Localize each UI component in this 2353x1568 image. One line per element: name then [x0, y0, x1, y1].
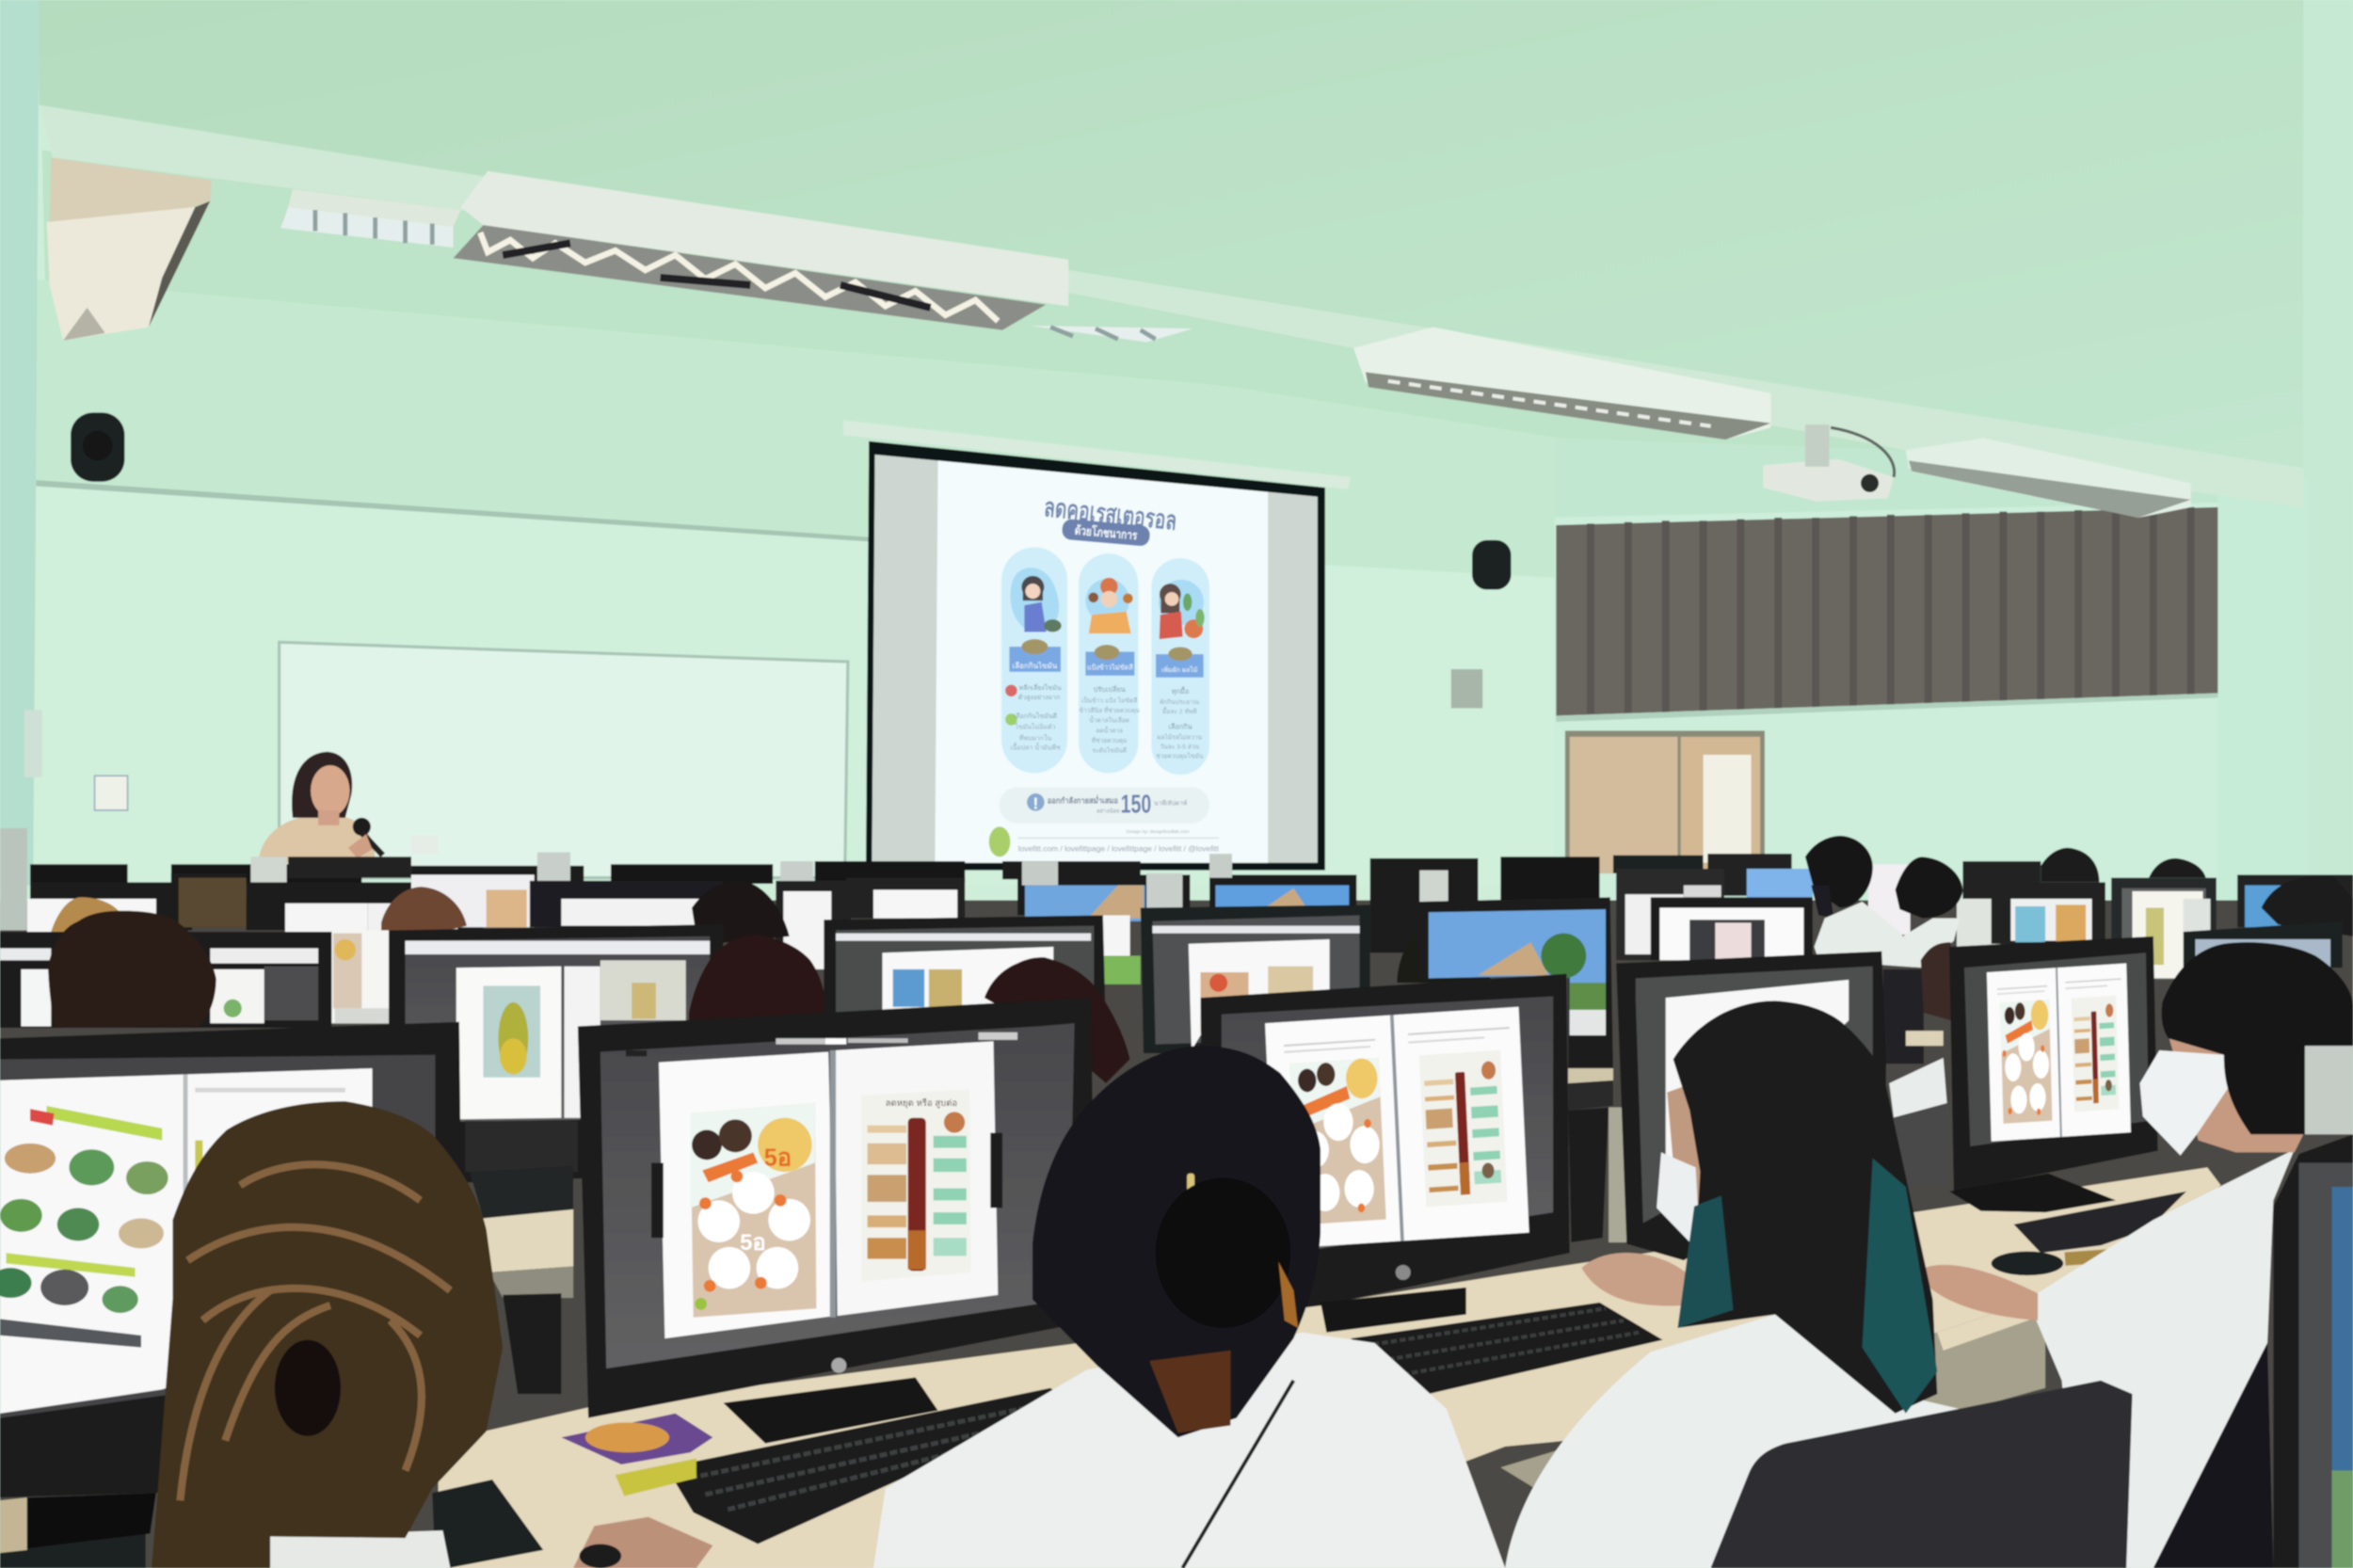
snack bag [561, 1414, 712, 1496]
back row students [51, 836, 2206, 968]
book infographic left: 5อ [740, 1230, 766, 1256]
exercise callout: ! [1032, 794, 1038, 813]
exercise callout: อย่างน้อย [1096, 808, 1120, 815]
column one: ตัวสูงอย่างมาก [1018, 694, 1060, 701]
toolbar [626, 1032, 1017, 1238]
keyboard and desk behind left [470, 1166, 573, 1394]
student head middle [689, 935, 827, 1032]
air conditioner [47, 157, 212, 341]
monitor with banana book [389, 924, 724, 1185]
monitor row three left [0, 932, 331, 1028]
monitor row three centre right [1141, 904, 1370, 1053]
column three [1151, 558, 1209, 775]
student with green hair [1505, 1000, 1960, 1568]
student front left [152, 1101, 712, 1568]
exercise callout [1000, 787, 1209, 824]
column three: เลือกกิน [1168, 723, 1193, 731]
column three: ช่วยควบคุมไขมัน [1156, 753, 1204, 760]
exercise callout: นาที/สัปดาห์ [1154, 800, 1187, 808]
speaker left [71, 412, 124, 482]
monitor behind green haired student [1616, 952, 1886, 1260]
wall items: thermostat and switch box [0, 669, 1482, 930]
ceiling light two [1353, 328, 1770, 440]
column three: ผลไม้รสไม่หวาน [1158, 734, 1203, 742]
column three: มื้อละ 2 ทัพพี [1162, 707, 1197, 715]
column two: เป็นข้าว แป้ง ไม่ขัดสี [1081, 696, 1137, 704]
slide footer [989, 826, 1220, 856]
speaker right [1472, 540, 1512, 590]
monitor row three centre [824, 915, 1106, 1035]
hp logo [831, 1358, 846, 1373]
right side back monitors [1651, 874, 2353, 980]
student head right middle [1397, 922, 1490, 983]
projected infographic [989, 492, 1220, 856]
projection screen [843, 420, 1351, 871]
slide subtitle pill [1062, 519, 1151, 547]
book infographic left [690, 1103, 816, 1318]
left front monitor [0, 1022, 464, 1497]
column two: น้ำตาลในเลือด [1089, 716, 1129, 725]
bottom left keyboard [0, 1480, 543, 1568]
keyboard centre right [1351, 1303, 1663, 1394]
column one: เนื้อปลา น้ำมันพืช [1010, 741, 1061, 751]
book chart contents [0, 1088, 345, 1348]
paper name cards [250, 836, 2000, 947]
book infographic right [861, 1089, 971, 1281]
column two [1079, 553, 1140, 773]
window curtain [1556, 507, 2217, 722]
desk [439, 1167, 2221, 1568]
column one: หลีกเลี่ยงไขมัน [1019, 683, 1062, 692]
book infographic strip between monitors [331, 930, 389, 1023]
main monitor [578, 998, 1096, 1418]
keyboard centre [666, 1388, 1068, 1544]
far right monitor [2273, 1134, 2353, 1568]
column two: ระดับไขมันดี [1092, 747, 1127, 755]
door [1565, 730, 1765, 873]
book infographic left: 5อ [764, 1145, 792, 1172]
column three: วันละ 3-5 ส่วน [1160, 744, 1200, 751]
slide footer: Design by: designfoodlab.com [1127, 829, 1189, 835]
monitor with building photo [1417, 897, 1613, 1068]
ceiling light one [280, 171, 1193, 342]
student head row three left [48, 911, 216, 1028]
base behind desks [0, 901, 2353, 1568]
column two: ปรับเปลี่ยน [1094, 684, 1126, 694]
monitor right front [1949, 936, 2158, 1212]
far monitor row [30, 854, 2041, 952]
column three: เพิ่มผัก ผลไม้ [1161, 665, 1197, 674]
student head centre back [984, 957, 1130, 1083]
keyboard right [1992, 1192, 2186, 1275]
student front right [1916, 942, 2353, 1568]
slide subtitle pill: ด้วยโภชนาการ [1074, 522, 1138, 542]
slide footer: lovefitt.com / lovefittpage / lovefittpage / lovefitt / @lovefitt [1018, 844, 1220, 853]
main monitor stand [724, 1378, 938, 1444]
column three: ทุกมื้อ [1172, 686, 1189, 696]
column one: เลือกกินไขมันดี [1014, 712, 1057, 720]
second monitor row [27, 864, 1911, 984]
column two: ข้าวสีนิล ที่ช่วยควบคุม [1079, 706, 1140, 714]
student front centre [873, 1046, 1505, 1568]
column one: ไขมันไม่อิ่มตัว [1015, 723, 1056, 731]
column two: ที่ช่วยควบคุม [1092, 736, 1128, 744]
desks and chairs right of middle [1568, 942, 1951, 1242]
ceiling light three [1906, 439, 2191, 518]
monitor centre right front [1201, 974, 1570, 1333]
projector [1763, 424, 1895, 501]
column two: แป้งข้าวไม่ขัดสี [1087, 663, 1133, 671]
column one: เลือกกินไขมัน [1013, 662, 1058, 670]
whiteboard [280, 642, 848, 878]
slide title: ลดคอเรสเตอรอล [1043, 492, 1178, 536]
chair [1711, 1381, 2133, 1568]
column one: ที่พบมากใน [1019, 733, 1052, 742]
book infographic right: ลดหยุด หรือ สูบต่อ [886, 1098, 957, 1109]
column two: ลดน้ำตาล [1096, 726, 1123, 734]
exercise callout: 150 [1121, 790, 1151, 819]
exercise callout: ออกกำลังกายสม่ำเสมอ [1048, 794, 1118, 806]
column one [1001, 547, 1067, 773]
lecturer [258, 752, 383, 863]
column three: ผักกินประมาณ [1160, 698, 1199, 706]
